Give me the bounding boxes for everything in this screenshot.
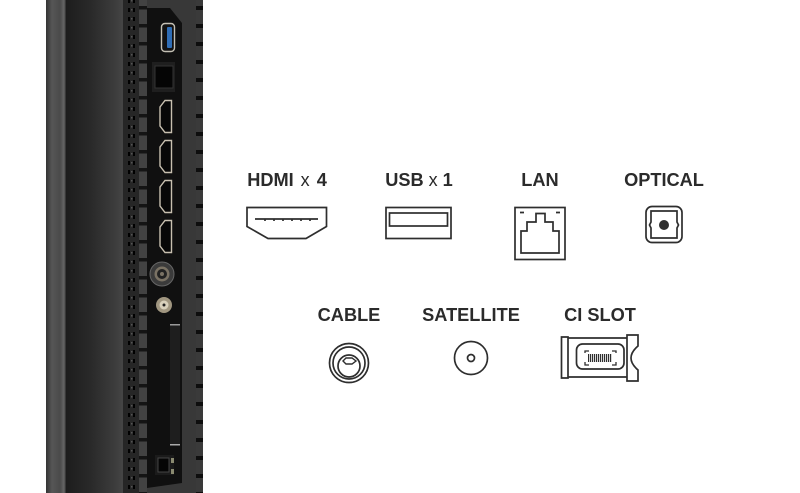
label: LAN: LAN (521, 170, 559, 190)
port: HDMI 1 (160, 100, 172, 132)
port: USB (162, 24, 174, 52)
icon: CABLE (330, 344, 368, 382)
port: CI slot (170, 324, 180, 446)
label: OPTICAL: OPTICAL (624, 170, 704, 190)
port: LAN (152, 62, 175, 92)
label: SATELLITE: SATELLITE (422, 305, 520, 325)
label: CI SLOT: CI SLOT (564, 305, 636, 325)
label: USB x 1: USB x 1 (385, 170, 453, 190)
icon: OPTICAL (646, 206, 682, 242)
connector plate (147, 8, 182, 488)
icon: LAN (515, 208, 565, 260)
icon: CI SLOT (562, 335, 638, 381)
port: cable (150, 262, 174, 286)
port: HDMI 2 (160, 140, 172, 172)
port: HDMI 4 (160, 220, 172, 252)
port: satellite (156, 297, 172, 313)
label: CABLE: CABLE (318, 305, 380, 325)
port: HDMI 3 (160, 180, 172, 212)
icon: SATELLITE (454, 342, 488, 374)
panel: TV rear side with ports (46, 0, 203, 493)
TV body (46, 0, 203, 493)
port: optical (155, 455, 174, 475)
icon: USB (386, 208, 451, 238)
icon: HDMI (247, 208, 326, 238)
label: HDMI x 4: HDMI x 4 (247, 170, 328, 190)
